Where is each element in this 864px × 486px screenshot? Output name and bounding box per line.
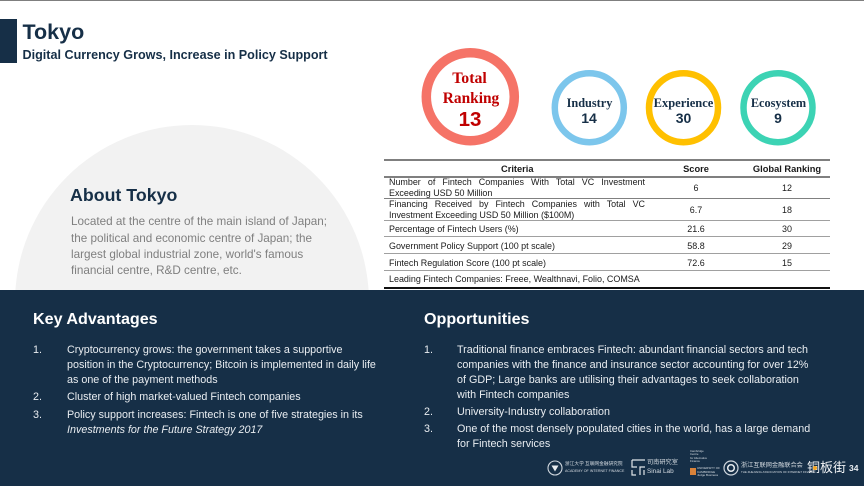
logo: Academy of Internet Finance: 浙江大学 互联网金融研究院: [565, 461, 623, 466]
table row 4: [389, 241, 792, 251]
list: opportunities: One of the most densely populated cities in the world, has a large demand: [457, 423, 810, 435]
table row 1: Exceeding USD 50 Million: [389, 188, 492, 198]
text block: about Tokyo: the political and economic centre of Japan; the: [71, 232, 312, 245]
logo: Sinai Lab: Sinai Lab: [647, 468, 674, 475]
table row 3: [389, 224, 792, 234]
heading: About Tokyo: About Tokyo: [70, 185, 177, 205]
ring: industry: 14: [581, 110, 597, 126]
subtitle: Digital Currency Grows, Increase in Policy Support: [22, 48, 328, 62]
table row 2: 6.7: [690, 205, 702, 215]
logo: Sinai Lab: 司南研究室: [647, 459, 678, 466]
ring: experience: 30: [676, 110, 691, 126]
table header row: Score: [683, 164, 709, 174]
panel: opportunities: [424, 310, 810, 450]
table row 2: Financing Received by Fintech Companies with Total VC: [389, 199, 645, 209]
table row 1: Number of Fintech Companies With Total VC Investment: [389, 177, 645, 187]
logo: Cambridge Centre for Alternative Finance: Cambridge: [690, 449, 704, 453]
list: opportunities: 1.: [424, 344, 433, 356]
table row 1: 6: [694, 183, 698, 193]
logo: Cambridge Centre for Alternative Finance: Judge Business: [697, 473, 718, 477]
panel: key advantages: [33, 310, 376, 436]
table row 2: 18: [782, 205, 792, 215]
logo: Cambridge Centre for Alternative Finance: Centre: [690, 452, 698, 456]
text block: about Tokyo: [71, 215, 327, 277]
table row 2: Investment Exceeding USD 50 Million ($100M): [389, 210, 574, 220]
list: key advantages: Policy support increases: Fintech is one of five strategies in its: [67, 409, 363, 421]
ring: ecosystem: Ecosystem: [751, 96, 807, 110]
table row 3: 30: [782, 224, 792, 234]
table row 3: Percentage of Fintech Users (%): [389, 224, 519, 234]
table row 4: Government Policy Support (100 pt scale): [389, 241, 555, 251]
logo: Sinai Lab: [631, 458, 678, 476]
table header row: Criteria: [501, 164, 534, 174]
table row 5: Fintech Regulation Score (100 pt scale): [389, 258, 546, 268]
text block: about Tokyo: financial centre, R&D centre, etc.: [71, 264, 242, 277]
title: Tokyo: [22, 20, 84, 44]
list: key advantages: Cryptocurrency grows: the government takes a supportive: [67, 344, 342, 356]
list: opportunities: [424, 344, 810, 450]
table row 1: 12: [782, 183, 792, 193]
ring: experience: [649, 73, 718, 142]
logo: Cambridge Centre for Alternative Finance: UNIVERSITY OF: [697, 466, 720, 470]
logo: Academy of Internet Finance: ACADEMY OF INTERNET FINANCE: [565, 469, 624, 473]
list: opportunities: 3.: [424, 423, 433, 435]
logo: Academy of Internet Finance: [547, 460, 624, 476]
logo: Tongbanjie: 铜板街: [807, 460, 846, 475]
list: opportunities: of GDP; Large banks are utilising their advantages to seek collaboration: [457, 374, 799, 386]
list: key advantages: 3.: [33, 409, 42, 421]
logo: Zhejiang Internet Finance Association: [723, 460, 816, 476]
list: opportunities: University-Industry collaboration: [457, 406, 610, 418]
table row 3: 21.6: [687, 224, 705, 234]
text block: about Tokyo: Located at the centre of the main island of Japan;: [71, 215, 327, 228]
logo: Zhejiang Internet Finance Association: THE ZHEJIANG ASSOCIATION OF INTERNET FINANCE: [741, 470, 816, 474]
logo: Cambridge Centre for Alternative Finance: [690, 449, 720, 477]
top rule: [0, 0, 864, 1]
ring: ecosystem: 9: [774, 110, 782, 126]
logo: Cambridge Centre for Alternative Finance: Finance: [690, 459, 700, 463]
list: opportunities: Traditional finance embraces Fintech: abundant financial sectors and tech: [457, 344, 808, 356]
list: key advantages: position in the Cryptocurrency; Bitcoin is implemented in daily life: [67, 359, 376, 371]
ring: total ranking: Total: [452, 70, 487, 87]
panel: about background circle: [15, 125, 369, 479]
table row 2: [389, 199, 792, 220]
list: key advantages: as one of the payment methods: [67, 374, 218, 386]
ring: industry: Industry: [567, 96, 613, 110]
ring: total ranking: 13: [459, 108, 481, 131]
ranking rings: [422, 48, 816, 146]
table row 6: leading companies: Leading Fintech Companies: Freee, Wealthnavi, Folio, COMSA: [389, 274, 640, 284]
ring: industry: [555, 73, 624, 142]
table: criteria scores: [384, 159, 830, 289]
list: opportunities: with Fintech companies: [457, 388, 569, 400]
table header row: [501, 164, 821, 174]
table row 4: 58.8: [687, 241, 705, 251]
table row 5: 15: [782, 258, 792, 268]
table header row: Global Ranking: [753, 164, 821, 174]
table row 5: 72.6: [687, 258, 705, 268]
list: opportunities: 2.: [424, 406, 433, 418]
ring: experience: Experience: [654, 96, 714, 110]
table row 4: 29: [782, 241, 792, 251]
ring: ecosystem: [744, 73, 812, 142]
ring: total ranking: Ranking: [443, 90, 500, 107]
logo: Zhejiang Internet Finance Association: 浙江互联网金融联合会: [741, 462, 803, 469]
panel: dark footer: [0, 290, 864, 486]
table row 1: [389, 177, 792, 198]
heading: key advantages: Key Advantages: [33, 310, 158, 328]
list: key advantages: Cluster of high market-valued Fintech companies: [67, 391, 301, 403]
logo: Cambridge Centre for Alternative Finance: for Alternative: [690, 456, 707, 460]
page number: 34: [849, 463, 858, 473]
heading: opportunities: Opportunities: [424, 310, 530, 328]
list: key advantages: [33, 344, 376, 436]
logo: Cambridge Centre for Alternative Finance: CAMBRIDGE: [697, 470, 715, 474]
list: key advantages: 2.: [33, 391, 42, 403]
ring: total ranking: [426, 53, 514, 141]
table row 5: [389, 258, 792, 268]
text block: about Tokyo: largest global industrial zone, world's famous: [71, 248, 303, 261]
list: key advantages: Investments for the Future Strategy 2017: [67, 424, 262, 436]
list: opportunities: companies with the finance and insurance sector accounting for over 12%: [457, 359, 808, 371]
list: opportunities: for Fintech services: [457, 438, 550, 450]
header block: [0, 19, 17, 63]
list: key advantages: 1.: [33, 344, 42, 356]
